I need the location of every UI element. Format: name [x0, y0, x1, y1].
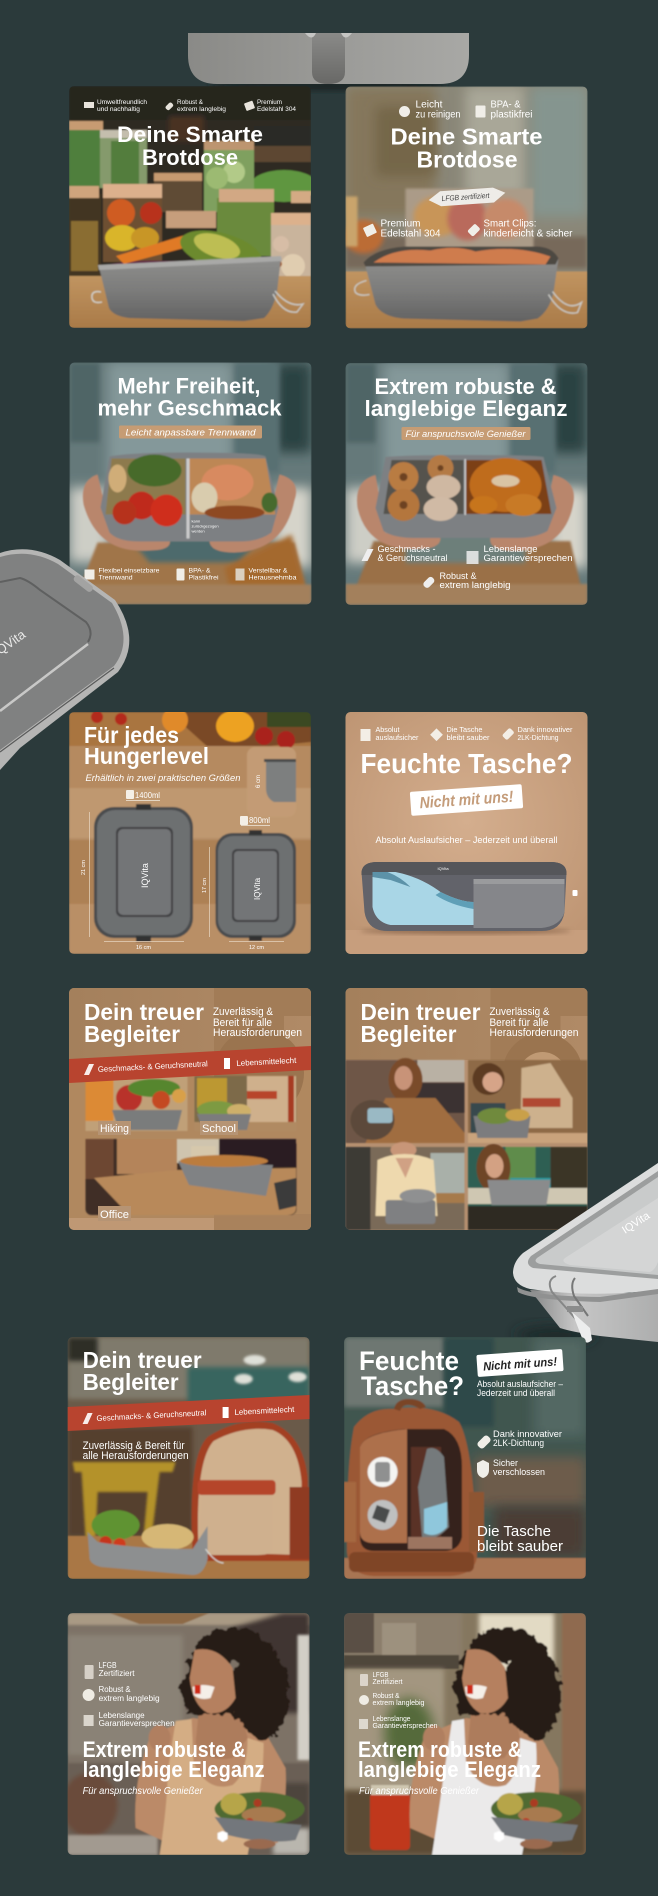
subtext: Bereit für alle	[213, 1017, 272, 1029]
photo: car	[346, 1058, 464, 1143]
features: Sicher	[493, 1458, 518, 1469]
photo: office woman	[346, 1142, 464, 1230]
features: Lebenslange	[372, 1716, 411, 1723]
features bottom: BPA- &	[188, 568, 211, 574]
banner: Geschmacks- & Geruchsneutral	[96, 1408, 207, 1423]
dimensions: 16 cm	[136, 945, 151, 951]
features top: Leicht	[416, 100, 443, 110]
divided lunchbox	[376, 455, 556, 538]
floor	[346, 930, 588, 954]
heading: langlebige Eleganz	[364, 396, 568, 421]
divider note: zurückgezogen	[192, 524, 219, 528]
features bottom: Verstellbar &	[248, 568, 288, 574]
panel: Dein treuer Begleiter, photos	[346, 988, 588, 1230]
features top: zu reinigen	[416, 110, 460, 120]
features top: bleibt sauber	[446, 733, 490, 742]
features: Garantieversprechen	[372, 1723, 438, 1730]
fruit	[91, 707, 311, 749]
subtitle	[477, 1379, 563, 1398]
hands	[357, 475, 574, 551]
dimensions: 800ml	[249, 816, 270, 825]
tile labels: Hiking	[100, 1123, 129, 1135]
feature callouts: Smart Clips:	[484, 218, 536, 230]
subtext: Bereit für alle	[490, 1017, 548, 1029]
spice jar	[154, 173, 202, 212]
cream jar	[271, 191, 311, 281]
features	[83, 1661, 175, 1728]
badge: Nicht mit uns	[476, 1349, 564, 1377]
heading: Brotdose	[142, 145, 238, 170]
steel box with water: IQVita	[438, 866, 449, 871]
heading: Feuchte	[359, 1346, 459, 1376]
features top: Die Tasche	[446, 725, 482, 734]
heading: Dein treuer	[83, 1347, 202, 1373]
heading	[84, 722, 209, 769]
banner: Lebensmittelecht	[234, 1405, 295, 1417]
features top: Edelstahl 304	[257, 107, 297, 113]
features bottom: Trennwand	[98, 574, 133, 582]
features	[476, 1429, 562, 1478]
dimensions: 6 cm	[256, 775, 262, 788]
features bottom: Herausnehmba	[248, 574, 297, 582]
features bottom: Garantieversprechen	[484, 553, 572, 563]
feature callouts: kinderleicht & sicher	[484, 228, 573, 240]
apron	[356, 541, 582, 589]
steel box	[355, 246, 582, 322]
left jars	[69, 121, 103, 276]
heading: Dein treuer	[360, 999, 481, 1025]
red jar	[370, 1785, 410, 1850]
features: Zertifiziert	[99, 1669, 135, 1678]
banner: Geschmacks- & Geruchsneutral	[98, 1059, 208, 1074]
features	[359, 1672, 438, 1730]
tile labels: School	[202, 1123, 236, 1135]
heading: Hungerlevel	[84, 743, 209, 769]
clips	[550, 1276, 592, 1343]
subtext: Zuverlässig & Bereit für	[83, 1440, 185, 1452]
table	[344, 1558, 586, 1579]
badge: LFGB: LFGB zertifiziert	[441, 191, 491, 203]
subtext	[83, 1440, 189, 1462]
inset detail circles	[368, 1457, 398, 1530]
divider note: kann	[192, 518, 200, 524]
feature callouts	[363, 219, 572, 237]
dimensions	[81, 775, 284, 951]
feature callouts: Premium	[380, 218, 420, 230]
tile labels: Office	[100, 1209, 129, 1221]
feature callouts: Edelstahl 304	[380, 228, 441, 240]
tile: hiking	[86, 1076, 188, 1131]
dimensions: 21 cm	[81, 860, 87, 875]
features top	[84, 100, 297, 113]
divider note: werden	[192, 528, 205, 534]
tile: office	[86, 1139, 296, 1215]
divider note	[192, 520, 218, 532]
badge: Nicht mit uns: Nicht mit uns!	[483, 1354, 557, 1374]
panel: Deine Smarte Brotdose, jars	[69, 86, 318, 328]
product: floating box right: IQVita	[620, 1209, 653, 1237]
features bottom: Flexibel einsetzbare	[98, 568, 160, 574]
pill subtitle: Für anspruchsvolle Genießer	[406, 429, 527, 439]
heading: Deine Smarte	[390, 124, 542, 150]
features bottom: extrem langlebig	[440, 580, 510, 590]
subtitle: Für anspruchsvolle Genießer	[359, 1786, 480, 1797]
features: Zertifiziert	[372, 1679, 403, 1686]
dimensions: 1400ml	[135, 791, 160, 800]
big lid box	[94, 804, 193, 942]
photo: school child	[468, 1060, 588, 1143]
features: extrem langlebig	[372, 1700, 425, 1707]
tomato jar	[103, 184, 162, 262]
features top: Umweltfreundlich	[97, 100, 147, 106]
leather backpack	[344, 1399, 484, 1576]
lid logos: IQVita	[253, 877, 262, 900]
panel: Dein treuer Begleiter, collage	[69, 988, 311, 1230]
features: 2LK-Dichtung	[493, 1438, 544, 1449]
food	[112, 230, 283, 268]
features top	[399, 100, 532, 120]
green bean jar	[217, 189, 274, 256]
subtitle: Für anspruchsvolle Genießer	[83, 1786, 203, 1797]
features top: BPA- &	[490, 100, 521, 110]
fruit jar	[406, 188, 534, 248]
features: LFGB	[99, 1661, 117, 1670]
tile labels	[98, 1121, 238, 1221]
features top	[360, 725, 573, 742]
closing line: bleibt sauber	[477, 1538, 563, 1555]
heading	[358, 1737, 541, 1782]
heading	[392, 128, 542, 168]
heading	[118, 126, 262, 165]
banner	[68, 1395, 310, 1431]
hands	[83, 474, 296, 552]
panel: Mehr Freiheit	[70, 362, 312, 604]
heading: Begleiter	[360, 1021, 457, 1047]
features bottom: Geschmacks -	[378, 544, 436, 554]
features bottom: Lebenslange	[484, 544, 538, 554]
panel: Dein treuer Begleiter, backpack	[68, 1337, 310, 1579]
features bottom: & Geruchsneutral	[378, 553, 448, 563]
closing line	[477, 1523, 563, 1555]
heading: Tasche?	[361, 1371, 464, 1401]
subtext	[490, 1006, 578, 1039]
subtitle: Absolut Auslaufsicher – Jederzeit und überall	[376, 835, 558, 846]
product: floating lid left	[0, 549, 129, 770]
heading	[359, 1346, 464, 1401]
lid logos	[140, 863, 262, 900]
subtext: Zuverlässig &	[490, 1006, 550, 1018]
salad box	[215, 1792, 305, 1849]
woman	[135, 1627, 289, 1855]
features top: plastikfrei	[490, 110, 532, 120]
subtext: Herausforderungen	[490, 1027, 578, 1039]
heading: Begleiter	[84, 1021, 180, 1047]
heading: Deine Smarte	[117, 122, 263, 147]
heading: Begleiter	[83, 1369, 179, 1395]
badge: Nicht mit uns	[410, 784, 523, 816]
heading	[98, 378, 282, 416]
heading	[360, 999, 481, 1047]
heading: Mehr Freiheit,	[118, 374, 260, 398]
features top: 2LK-Dichtung	[518, 733, 558, 742]
photo: hiking girl	[468, 1144, 588, 1230]
panel: Feuchte Tasche, water	[346, 712, 588, 954]
features bottom: Plastikfrei	[188, 574, 218, 582]
subtext: alle Herausforderungen	[83, 1450, 189, 1462]
heading: Feuchte Tasche?	[360, 748, 572, 779]
lid logos: IQVita	[140, 863, 150, 888]
dimensions: 12 cm	[249, 945, 264, 951]
tall bean jar	[100, 130, 147, 188]
features bottom	[84, 568, 297, 580]
features top: auslaufsicher	[376, 733, 419, 742]
product: lunchbox top	[188, 33, 469, 91]
heading	[84, 999, 204, 1047]
dimensions: 17 cm	[202, 878, 208, 893]
badge: LFGB	[428, 187, 506, 207]
heading: mehr Geschmack	[98, 396, 282, 420]
features bottom: Robust &	[440, 571, 476, 581]
steel box	[92, 256, 303, 321]
features top: Robust &	[177, 100, 203, 106]
badge: Nicht mit uns: Nicht mit uns!	[419, 789, 515, 812]
pill subtitle	[119, 426, 262, 438]
features: extrem langlebig	[99, 1694, 160, 1703]
tile: school	[194, 1076, 296, 1131]
backpack	[192, 1422, 310, 1561]
subtitle: Absolut auslaufsicher –	[477, 1379, 563, 1389]
heading	[83, 1347, 202, 1395]
banner	[69, 1046, 311, 1083]
panel: Extrem robuste, woman beige top	[62, 1613, 310, 1855]
closing line: Die Tasche	[477, 1523, 551, 1540]
heading: Für jedes	[84, 722, 179, 748]
subtitle: Erhältlich in zwei praktischen Größen	[86, 773, 240, 784]
banner: Lebensmittelecht	[236, 1056, 297, 1068]
subtext: Zuverlässig &	[213, 1006, 274, 1018]
features: LFGB	[372, 1672, 389, 1679]
heading: Extrem robuste &	[374, 374, 557, 399]
panel: Deine Smarte Brotdose, salmon	[344, 86, 588, 328]
heading: Extrem robuste &	[358, 1737, 522, 1762]
table	[68, 1536, 310, 1579]
features: Dank innovativer	[493, 1429, 562, 1440]
steel box with water	[362, 862, 578, 931]
heading: Dein treuer	[84, 999, 204, 1025]
woman	[410, 1627, 561, 1855]
panel: Feuchte Tasche, backpack	[344, 1337, 586, 1579]
small lid	[166, 211, 216, 228]
heading: Extrem robuste &	[83, 1737, 246, 1762]
cucumber jar	[204, 141, 254, 212]
features top: Absolut	[376, 725, 400, 734]
product: floating box right	[513, 1163, 658, 1344]
subtext: Herausforderungen	[213, 1027, 302, 1039]
subtext	[213, 1006, 302, 1039]
lettuce background	[250, 170, 318, 202]
subtitle: Jederzeit und überall	[477, 1388, 555, 1398]
apron	[80, 542, 306, 588]
food and box	[88, 1510, 224, 1575]
features top: Dank innovativer	[518, 725, 573, 734]
table	[69, 276, 311, 328]
pill subtitle	[402, 427, 530, 440]
features: verschlossen	[493, 1467, 545, 1478]
features bottom	[362, 544, 572, 590]
heading	[366, 378, 567, 420]
features top: extrem langlebig	[177, 107, 226, 113]
table	[346, 272, 588, 328]
features: Robust &	[372, 1693, 400, 1700]
heading: langlebige Eleganz	[83, 1757, 265, 1782]
features top: Premium	[257, 100, 282, 106]
small lid box	[216, 830, 296, 941]
divided lunchbox	[100, 452, 278, 542]
features top: und nachhaltig	[97, 107, 140, 113]
pill subtitle: Leicht anpassbare Trennwand	[126, 428, 257, 438]
features: Lebenslange	[99, 1711, 145, 1720]
inset: side view	[247, 747, 296, 817]
heading: langlebige Eleganz	[358, 1757, 541, 1782]
features: Robust &	[99, 1685, 131, 1694]
salad box	[491, 1792, 581, 1849]
panel: Extrem robuste, woman white top	[344, 1613, 586, 1855]
panel: Für jedes Hungerlevel	[69, 707, 311, 954]
panel: Extrem robuste, donuts	[346, 363, 588, 605]
features: Garantieversprechen	[99, 1719, 175, 1728]
heading: Brotdose	[416, 146, 518, 172]
heading	[83, 1737, 265, 1782]
